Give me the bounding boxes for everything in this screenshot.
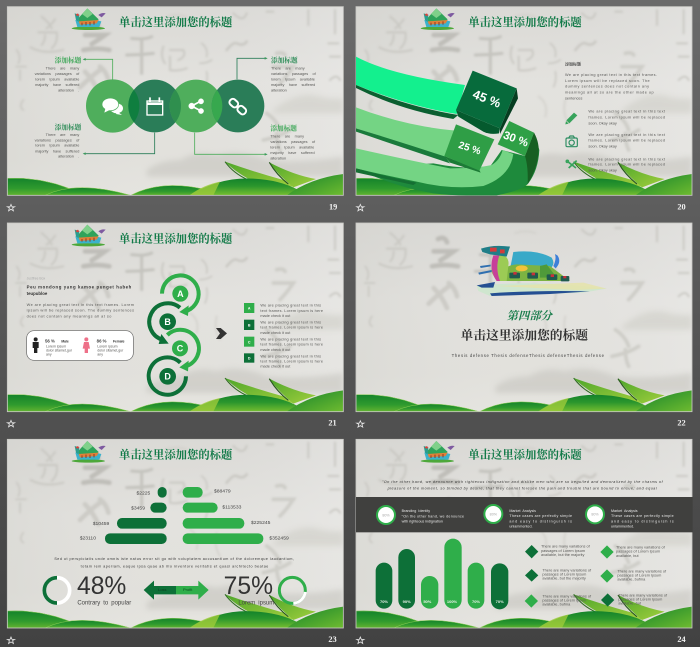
top-left callout: alteration . [58, 88, 79, 92]
list item C: made check it out [260, 348, 291, 352]
subtitle: Thesis defense Thesis defenseThesis defenseThesis defense [452, 353, 605, 358]
item 1 text: Branding Identity [402, 509, 430, 513]
logo [72, 8, 106, 30]
cycle: B [149, 303, 180, 344]
list item A: text frames. Lorem ipsum is here [260, 309, 323, 313]
bottom-left callout: variations passages of [35, 138, 80, 142]
text block: 添加标题 [565, 60, 581, 66]
item text 3 [588, 157, 666, 173]
logo [421, 8, 455, 30]
dragon boat illustration [477, 246, 607, 296]
circles [86, 79, 264, 133]
top-right callout: 添加标题 [271, 56, 298, 65]
list item B: text frames. Lorem ipsum is here [260, 326, 323, 330]
list item B [244, 320, 323, 335]
diamond item 6: available, but [618, 602, 642, 606]
stat 75%: Lorem ipsum [238, 600, 274, 606]
male stat: dolor sitamet,gur [46, 348, 73, 352]
diamond item 5 [525, 594, 592, 608]
diamond item 6: passages of Lorem Ipsum [618, 597, 662, 601]
heading block [27, 277, 132, 296]
diamond item 4: There are many variations of [617, 569, 667, 573]
bar chart: 70% [472, 599, 480, 604]
female stat [97, 339, 125, 356]
icon: tools [566, 160, 577, 168]
female stat: 86 % [97, 339, 107, 344]
logo [421, 441, 455, 463]
icon: woman [83, 337, 90, 353]
bottom-right callout: majority have suffered [270, 151, 315, 155]
bar labels right [214, 488, 289, 542]
paragraph: Sed ut perspiciatis unde omnis iste natus error sit go with voluptatem accusantium of the doloremque laudantium, [54, 557, 294, 561]
slide 23: bars and donuts [7, 439, 343, 644]
diamond item 2: passages of Lorem Ipsum [616, 550, 660, 554]
title: 单击这里添加您的标题 [468, 448, 582, 462]
list item B: We are placing great text in this [260, 320, 321, 324]
diamond item 6 [601, 593, 668, 607]
butterfly bars left [105, 487, 167, 544]
list item C [244, 337, 323, 352]
item text 3: We are placing great text in this text [588, 157, 666, 161]
list item B: made check it out [260, 331, 291, 335]
quote [382, 480, 664, 490]
bar labels right: $352459 [269, 536, 289, 542]
list item A: A [248, 307, 251, 311]
bar chart: 90% [403, 599, 411, 604]
footer star [7, 204, 15, 211]
female stat: Female [113, 339, 125, 343]
diamond item 4: passages of Lorem Ipsum [617, 573, 661, 577]
item 2 text: These cases are perfectly simple [509, 514, 572, 518]
list item D [244, 353, 323, 369]
diamond item 1 [525, 545, 591, 558]
item 2 text [509, 509, 572, 529]
diamond item 2 [600, 545, 666, 559]
diamond item 4: available, bufma [617, 577, 646, 581]
slide number: 22 [677, 419, 686, 428]
top-left callout: There are many [46, 66, 79, 70]
bar labels right: $113533 [222, 505, 242, 511]
list item A [244, 303, 323, 318]
diamond item 4 [600, 569, 667, 583]
male stat: 56 % [45, 339, 55, 344]
ring 1 [377, 506, 395, 524]
top-left callout: variations passages of [35, 72, 80, 76]
bottom-left callout: majority have suffered [35, 149, 79, 153]
section label: 第四部分 [507, 309, 554, 322]
ring 3 [586, 505, 604, 523]
item 2 text: Market Analysis [509, 509, 536, 513]
item 3 text [611, 509, 674, 529]
bottom-left callout: 添加标题 [55, 122, 82, 131]
bottom-right callout: 添加标题 [270, 124, 297, 133]
bar labels left: $3459 [131, 505, 145, 511]
diamond item 3: passages of Lorem Ipsum [542, 573, 586, 577]
male stat: Male [61, 339, 69, 343]
bottom-left callout [35, 122, 82, 159]
loss/profit arrow [144, 581, 209, 600]
item text 2: soon. Okay okay [588, 145, 617, 149]
top-left callout: 添加标题 [55, 56, 82, 65]
slide number: 19 [329, 202, 337, 211]
slide number: 21 [328, 419, 337, 428]
gender stats card [27, 331, 133, 360]
bar labels right: $225245 [251, 520, 271, 526]
cycle: A [162, 275, 199, 316]
top-right callout: alteration [271, 88, 287, 92]
ring 1: 80% [382, 513, 390, 517]
diamond item 2: There are many variations of [616, 545, 666, 549]
paragraph [27, 303, 134, 319]
icon: camera [566, 136, 577, 147]
block 45%: 45 % [471, 87, 503, 111]
heading block: teupubloe [27, 291, 48, 296]
stat 75%: 75% [224, 573, 273, 600]
item 2 text: and easy to distinguish is [509, 519, 572, 523]
icon: share [189, 99, 204, 114]
diamond item 6: There are many variations of [618, 593, 668, 597]
bar labels left: $23110 [80, 536, 96, 542]
item text 3: soon. Okay okay [588, 169, 617, 173]
paragraph [54, 557, 294, 569]
title: 单击这里添加您的标题 [468, 15, 582, 29]
top-left callout: lorem Ipsum available [35, 78, 79, 82]
diamond item 5: passages of Lorem Ipsum [542, 599, 586, 603]
text block [565, 60, 657, 100]
item 3 text: unlammented. [611, 525, 634, 529]
list item C: text frames. Lorem ipsum is here [260, 343, 323, 347]
slide 19: four overlapping circles [7, 7, 343, 211]
icon: calendar [147, 97, 163, 115]
top-left callout [35, 56, 82, 92]
diamond item 2: available, but [616, 554, 639, 558]
logo [72, 441, 106, 463]
item 1 text [402, 509, 464, 524]
heading block: Justfree Box [27, 277, 46, 281]
item text 2 [588, 133, 666, 149]
block 45% [456, 71, 518, 134]
stat 48%: 48% [77, 573, 126, 600]
diamond item 5: There are many variations of [542, 594, 592, 598]
bar labels left [80, 490, 151, 542]
item 2 text: unlammented. [509, 525, 533, 529]
item 3 text: and easy to distinguish is [611, 519, 674, 523]
bottom-right callout: variations passages of [270, 140, 316, 144]
cycle: B: B [164, 317, 171, 327]
top-right callout: variations passages of [271, 72, 317, 76]
text block: sentences [565, 96, 583, 100]
top-right callout: majority have suffered [271, 83, 315, 87]
slide 21: cycle diagram [7, 223, 343, 428]
paragraph: We are placing great text in this text frames. Lorem [27, 303, 134, 307]
quote: pleasure of the moment, so blinded by desire, that they cannot foresee the pain and trouble that are bound to ensue; and equal [387, 486, 657, 490]
item text 3: frames. Lorem ipsum will be replaced [588, 163, 665, 167]
ring 2: 80% [490, 512, 498, 516]
ring 2 [484, 505, 502, 523]
slide 22: section divider [356, 223, 692, 428]
title: 单击这里添加您的标题 [119, 15, 233, 29]
cycle: C [167, 330, 199, 371]
title: 单击这里添加您的标题 [119, 231, 233, 245]
bottom-left callout: lorem Ipsum available [35, 144, 79, 148]
section title: 单击这里添加您的标题 [461, 327, 588, 342]
cycle: D [149, 357, 186, 395]
bar chart: 70% [380, 599, 388, 604]
list item D: text frames. Lorem ipsum is here [260, 360, 323, 364]
logo [72, 225, 106, 246]
donut 75% [279, 577, 305, 603]
slide number: 24 [677, 635, 686, 644]
item 1 text: with righteous indignation [402, 520, 443, 524]
diamond item 1: available, but the majority [541, 553, 584, 557]
bar chart [376, 539, 508, 609]
icon: chat bubbles [102, 98, 123, 115]
bottom-right callout: lorem Ipsum available [270, 145, 314, 149]
dark band [356, 497, 693, 532]
bar labels right: $88479 [214, 488, 231, 494]
text block: dummy sentences does not contain any [565, 85, 649, 89]
ring 3: 80% [591, 513, 599, 517]
female stat: Lorem ipsum [97, 344, 118, 348]
bar labels left: $2225 [136, 490, 151, 496]
text block: meanings all at so are the other made up [565, 90, 654, 94]
leader lines [83, 57, 268, 156]
loss/profit arrow: Loss [158, 587, 167, 592]
list item C: We are placing great text in this [260, 337, 321, 341]
diamond item 5: available, bufma [542, 603, 571, 607]
bar chart: 100% [447, 599, 458, 604]
item text 1 [588, 110, 666, 125]
list item D: made check it out [260, 365, 291, 369]
icon: pencil [565, 113, 577, 124]
list item D: We are placing great text in this [260, 354, 321, 358]
ribbon chart [356, 57, 539, 195]
diamond item 1: There are many variations of [541, 545, 591, 549]
footer star [7, 420, 15, 427]
block 30%: 30 % [501, 130, 530, 150]
bottom-right callout: alteration [270, 157, 286, 161]
list item A: We are placing great text in this [260, 304, 321, 308]
footer star [357, 637, 364, 643]
arrow: chevron [216, 328, 227, 339]
female stat: dolor sitamet,gur [97, 348, 124, 352]
quote: "On the other hand, we denounce with righteous indignation and dislike men who are so beguiled and demoralized by the charms of [382, 480, 664, 484]
cycle: D: D [164, 372, 171, 382]
item text 2: We are placing great text in this text [588, 133, 666, 137]
cycle: A: A [177, 289, 184, 299]
slide number: 20 [677, 202, 686, 211]
heading block: Peu mondong yang kamoe punget habeh [27, 284, 132, 289]
paragraph: ipsum will be replaced soon. The dummy sentences [27, 309, 134, 313]
top-right callout: There are many [271, 66, 305, 70]
list item C: C [248, 340, 251, 344]
slide 20: 3D ribbons [356, 7, 692, 211]
icon: man [33, 337, 39, 353]
stat 48%: Contrary to popular [77, 600, 131, 606]
top-right callout [271, 56, 317, 92]
slide number: 23 [328, 635, 337, 644]
top-left callout: majority have suffered [35, 83, 79, 87]
footer star [357, 421, 364, 427]
item text 2: frames. Lorem ipsum will be replaced [588, 139, 665, 143]
cycle: C: C [177, 344, 184, 354]
male stat [45, 339, 73, 356]
bar labels left: $10459 [93, 521, 110, 527]
item text 1: frames. Lorem ipsum will be replaced [588, 115, 665, 119]
item 3 text: These cases are perfectly simple [611, 514, 674, 518]
diamond item 3 [525, 568, 592, 582]
paragraph: totam rem aperiam, eaque ipsa quae ab illo inventore veritatis et quasi architecto beatae [81, 565, 268, 569]
list item B: B [248, 323, 251, 327]
donut 48% [44, 578, 70, 603]
bottom-right callout [270, 124, 316, 161]
top-right callout: lorem Ipsum available [271, 78, 315, 82]
item text 1: We are placing great text in this text [588, 110, 666, 114]
text block: We are placing great text in this text frames. [565, 73, 657, 77]
icon: chain link [228, 98, 247, 116]
male stat: Lorem ipsum [46, 344, 66, 348]
block 25%: 25 % [457, 140, 482, 158]
item 1 text: "On the other hand, we denounce [402, 514, 464, 518]
slide 24: dark band, bars and diamonds [356, 439, 693, 644]
bottom-right callout: There are many [270, 135, 304, 139]
list item D: D [248, 357, 251, 361]
paragraph: does not contain any meanings all at so [27, 315, 111, 319]
loss/profit arrow: Profit [183, 587, 193, 592]
bottom-left callout: There are many [46, 133, 79, 137]
female stat: any [97, 352, 103, 356]
diamond item 1: passages of Lorem Ipsum [541, 549, 585, 553]
footer star [357, 204, 364, 211]
block 30% [498, 121, 534, 156]
bar chart: 50% [423, 599, 432, 604]
male stat: any [46, 352, 52, 356]
diamond item 3: There are many variations of [542, 568, 592, 572]
bottom-left callout: alteration . [58, 155, 79, 159]
diamond item 3: available, but the majority [542, 577, 586, 581]
butterfly bars right [183, 487, 263, 544]
block 25% [444, 124, 494, 173]
bar chart: 70% [496, 599, 504, 604]
title: 单击这里添加您的标题 [119, 448, 233, 462]
footer star [7, 637, 15, 643]
list item A: made check it out [260, 314, 291, 318]
item text 1: soon. Okay okay [588, 121, 617, 125]
text block: Lorem ipsum will be replaced soon. The [565, 79, 650, 83]
item 3 text: Market Analysis [611, 509, 638, 513]
